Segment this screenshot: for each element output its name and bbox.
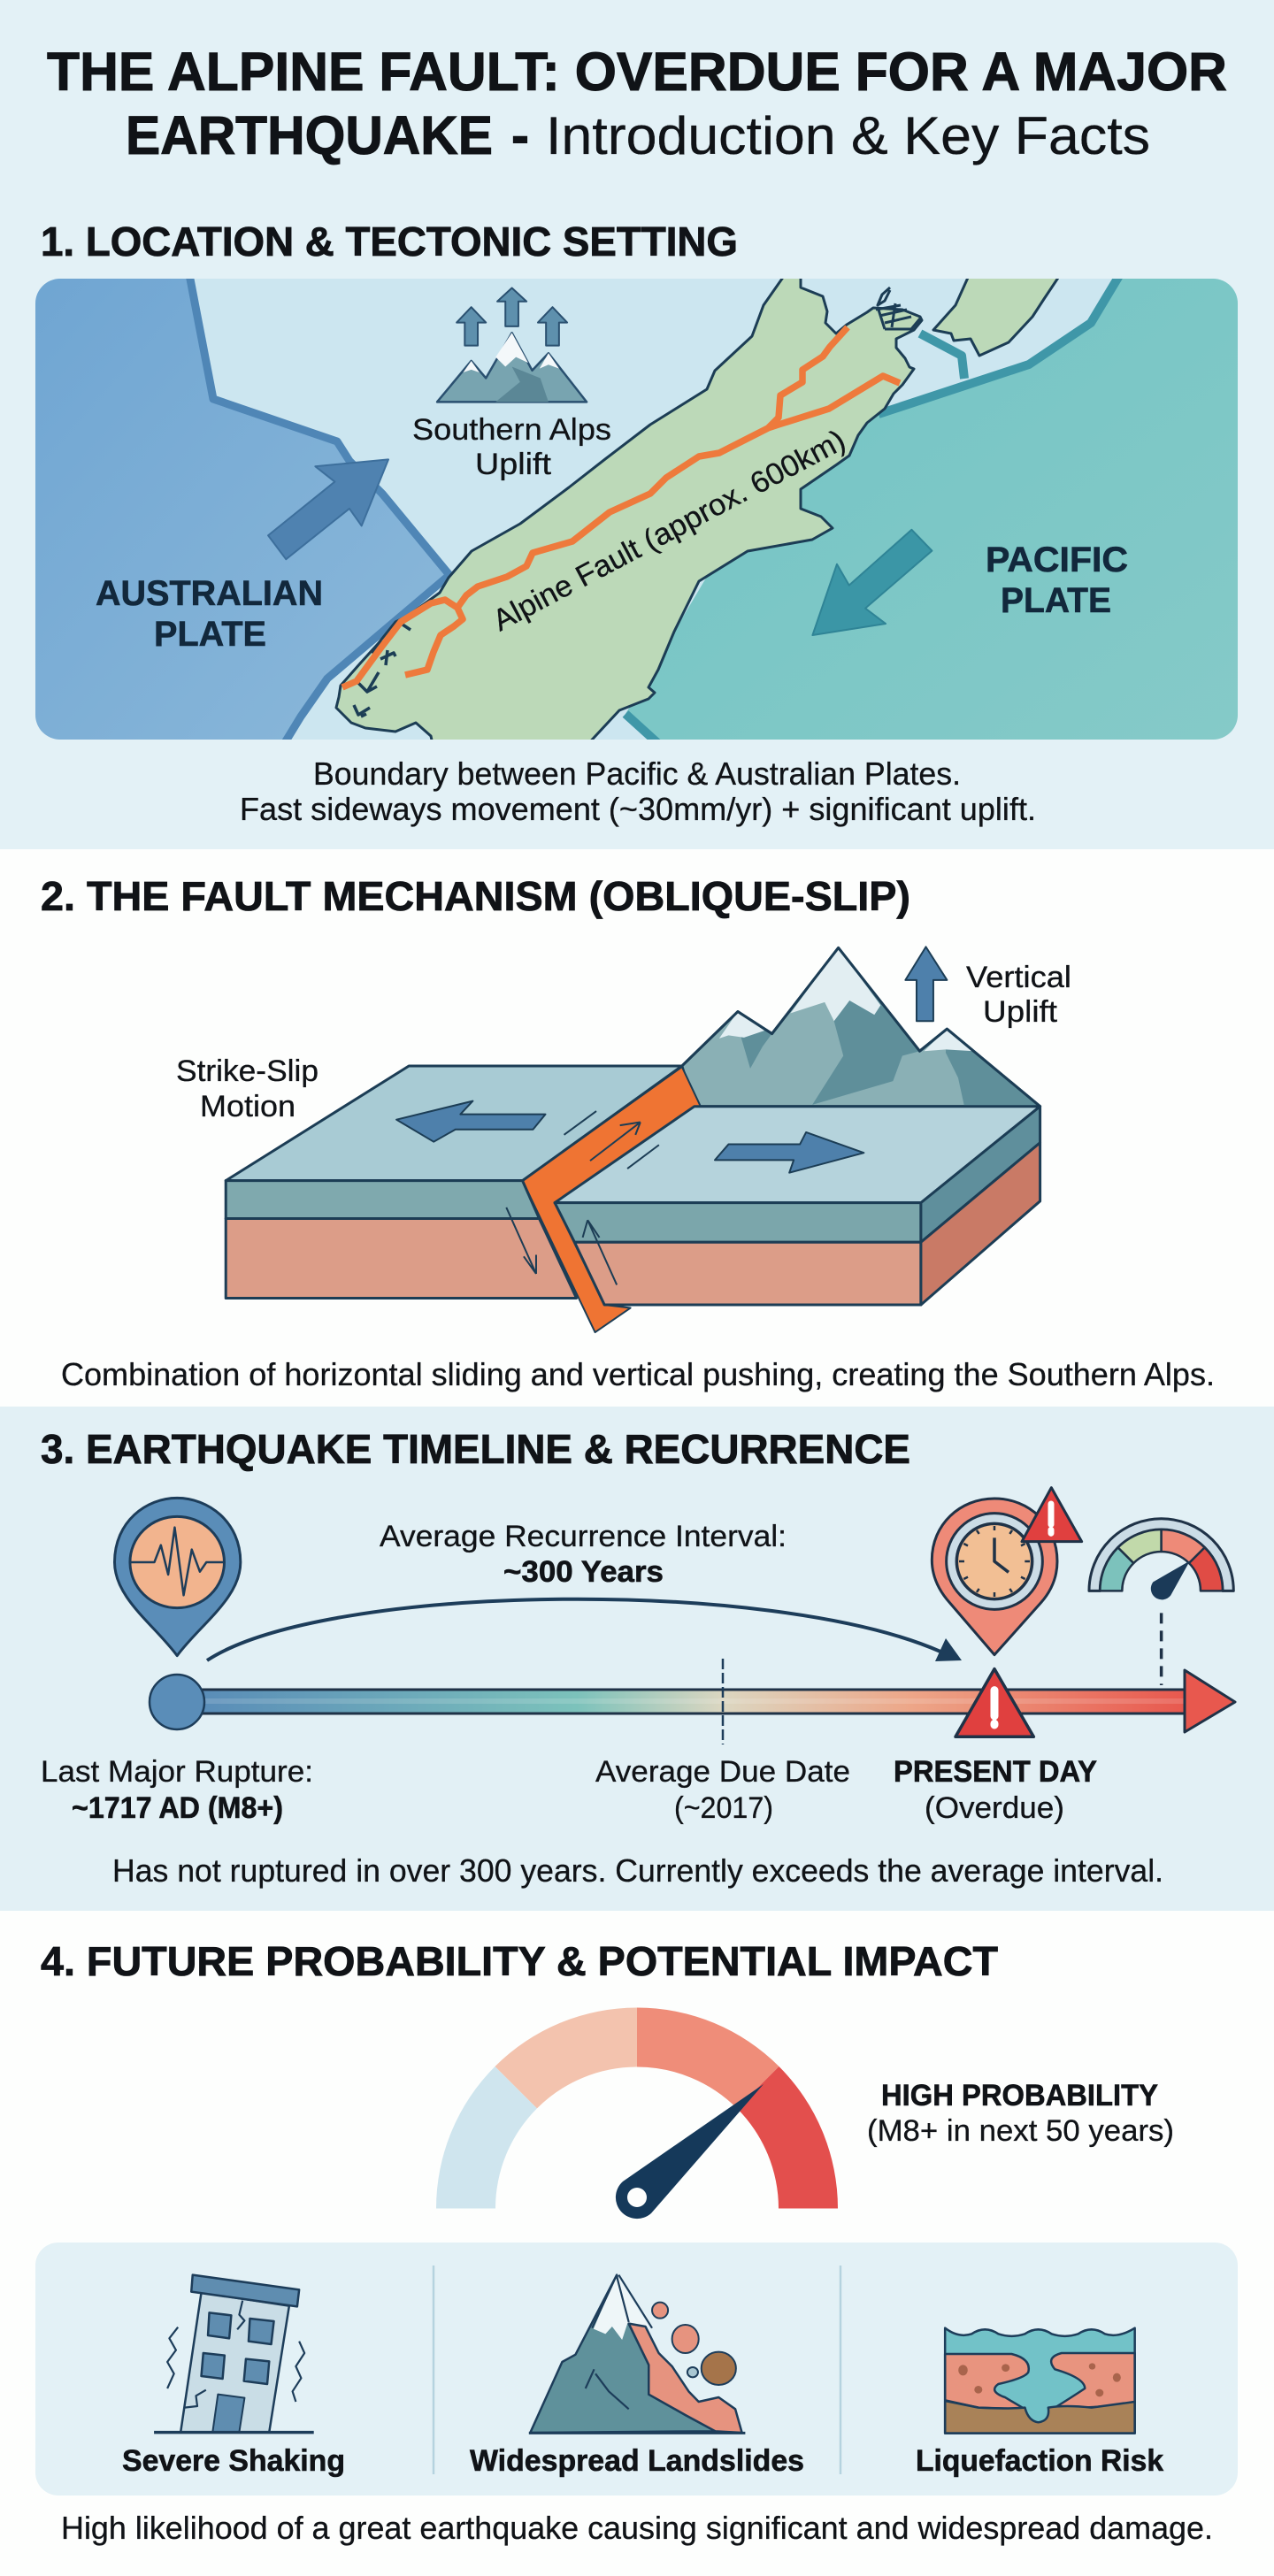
title: Introduction & Key Facts bbox=[546, 106, 1150, 165]
label: Southern Alps Uplift bbox=[412, 413, 611, 481]
fault block diagram bbox=[226, 947, 1040, 1332]
clock ring bbox=[947, 1514, 1042, 1609]
label: Southern Alps Uplift: Uplift bbox=[475, 448, 552, 481]
label: liquefaction risk: Liquefaction Risk bbox=[916, 2444, 1163, 2478]
pin: present day bbox=[932, 1499, 1057, 1655]
right block crust bbox=[555, 1203, 921, 1242]
warning mark: present day bbox=[990, 1690, 998, 1725]
caption: section 1 bbox=[240, 755, 1036, 827]
label: Southern Alps Uplift: Southern Alps bbox=[412, 413, 611, 447]
label: last rupture bbox=[41, 1755, 313, 1825]
title bbox=[47, 42, 1227, 165]
Australian plate arrow bbox=[268, 459, 388, 559]
heading: section 2: 2. THE FAULT MECHANISM (OBLIQUE-SLIP) bbox=[41, 873, 910, 919]
impact dividers bbox=[434, 2266, 840, 2474]
North Island bbox=[932, 279, 1060, 357]
label: Pacific Plate: PACIFIC bbox=[986, 540, 1128, 579]
bar edge lines bbox=[199, 1690, 1186, 1714]
label: present day bbox=[894, 1755, 1097, 1825]
title: EARTHQUAKE bbox=[126, 105, 493, 165]
panel: tectonic map bbox=[27, 270, 1274, 748]
timeline graphic bbox=[114, 1488, 1235, 1744]
mountains bbox=[682, 947, 1040, 1107]
clock hands bbox=[994, 1537, 1009, 1572]
caption: section 3: Has not ruptured in over 300 years. Currently exceeds the average interval. bbox=[112, 1852, 1163, 1889]
label: Australian Plate: PLATE bbox=[154, 615, 266, 654]
label: high probability: HIGH PROBABILITY bbox=[881, 2079, 1158, 2112]
needle hub bbox=[627, 2188, 647, 2207]
title: - bbox=[511, 105, 529, 165]
clock face bbox=[956, 1523, 1032, 1599]
Marlborough Sounds bbox=[876, 288, 920, 329]
caption: section 1: Fast sideways movement (~30mm/yr) + significant uplift. bbox=[240, 791, 1036, 827]
warning triangle: clock bbox=[1022, 1488, 1082, 1542]
timeline arrowhead bbox=[1185, 1670, 1235, 1732]
label: due date: (~2017) bbox=[674, 1791, 773, 1825]
label: Australian Plate bbox=[96, 574, 323, 654]
South Island bbox=[336, 270, 922, 748]
label: Strike-Slip Motion: Strike-Slip bbox=[176, 1054, 318, 1088]
label: present day: PRESENT DAY bbox=[894, 1755, 1097, 1789]
Pacific plate arrow bbox=[812, 530, 932, 635]
left block top bbox=[226, 1066, 682, 1181]
gauge high band bbox=[737, 2066, 838, 2208]
Pacific plate bbox=[625, 270, 1274, 748]
small gauge outer bbox=[1089, 1519, 1233, 1591]
section background: timeline bbox=[0, 1407, 1274, 1911]
label: recurrence interval bbox=[380, 1520, 787, 1589]
caption: section 1: Boundary between Pacific & Australian Plates. bbox=[313, 755, 961, 792]
mountain icon bbox=[437, 333, 587, 402]
small gauge green bbox=[1118, 1530, 1162, 1563]
left motion arrow bbox=[396, 1101, 545, 1142]
panel: impacts bbox=[35, 2242, 1238, 2496]
label: recurrence interval: ~300 Years bbox=[503, 1555, 664, 1589]
mountain shade bbox=[495, 366, 549, 402]
section background: probability bbox=[0, 1911, 1274, 2576]
title: THE ALPINE FAULT: OVERDUE FOR A MAJOR bbox=[47, 42, 1227, 102]
Alpine Fault line bbox=[342, 327, 900, 687]
label: widespread landslides: Widespread Landslides bbox=[470, 2444, 804, 2478]
warning triangle: present day bbox=[956, 1669, 1033, 1736]
label: Australian Plate: AUSTRALIAN bbox=[96, 574, 323, 613]
right side crust bbox=[921, 1107, 1040, 1242]
timeline bar bbox=[199, 1690, 1186, 1714]
probability gauge bbox=[436, 2008, 838, 2219]
small gauge orange bbox=[1162, 1530, 1205, 1563]
label: severe shaking: Severe Shaking bbox=[122, 2444, 345, 2478]
redraw mountain outline bbox=[682, 947, 1040, 1107]
icon: shaking building bbox=[154, 2275, 314, 2433]
clock pin, warning and small gauge bbox=[932, 1488, 1233, 1736]
label: present day: (Overdue) bbox=[925, 1791, 1064, 1825]
label: due date bbox=[595, 1755, 850, 1825]
due date marker bbox=[722, 1659, 724, 1744]
vertical uplift arrow bbox=[905, 947, 947, 1021]
label: Pacific Plate: PLATE bbox=[1001, 581, 1111, 620]
label: last rupture: Last Major Rupture: bbox=[41, 1755, 313, 1789]
bar highlight bbox=[199, 1698, 1186, 1704]
heading: section 1: 1. LOCATION & TECTONIC SETTING bbox=[41, 218, 738, 264]
fault plane bbox=[523, 1067, 701, 1332]
icon: landslide mountain bbox=[529, 2275, 745, 2433]
right block mantle bbox=[574, 1242, 921, 1305]
label: recurrence interval: Average Recurrence Interval: bbox=[380, 1520, 787, 1553]
right motion arrow bbox=[715, 1132, 863, 1173]
label: Pacific Plate bbox=[986, 540, 1128, 620]
section background: location bbox=[0, 0, 1274, 849]
caption: section 2: Combination of horizontal sliding and vertical pushing, creating the Southern Alps. bbox=[61, 1356, 1215, 1392]
gauge moderate band bbox=[495, 2008, 637, 2108]
clock ticks bbox=[959, 1526, 1030, 1597]
recurrence arrowhead bbox=[935, 1638, 962, 1661]
gauge needle bbox=[616, 2084, 764, 2219]
icon: liquefaction soil bbox=[945, 2328, 1135, 2434]
heading: section 4: 4. FUTURE PROBABILITY & POTENTIAL IMPACT bbox=[41, 1938, 998, 1984]
gauge drop line bbox=[1160, 1613, 1163, 1685]
gauge elevated band bbox=[637, 2008, 779, 2108]
label: high probability: (M8+ in next 50 years) bbox=[867, 2114, 1174, 2148]
small gauge needle bbox=[1151, 1560, 1190, 1599]
Pacific plate boundaries bbox=[625, 270, 1123, 748]
label: Strike-Slip Motion: Motion bbox=[200, 1090, 295, 1123]
left block mantle bbox=[226, 1218, 577, 1298]
gauge low band bbox=[436, 2066, 537, 2208]
right side mantle bbox=[921, 1143, 1040, 1305]
small gauge teal bbox=[1100, 1547, 1133, 1591]
uplift arrows bbox=[457, 288, 567, 346]
mountain snow bbox=[463, 333, 559, 372]
label: Alpine Fault: Alpine Fault (approx. 600km) bbox=[487, 424, 851, 638]
label: Vertical Uplift: Uplift bbox=[983, 995, 1058, 1029]
recurrence curve bbox=[207, 1599, 940, 1660]
sea bbox=[195, 279, 1112, 740]
timeline start bbox=[150, 1675, 204, 1729]
caption: section 4: High likelihood of a great earthquake causing significant and widespread damage. bbox=[61, 2510, 1213, 2546]
label: Strike-Slip Motion bbox=[176, 1054, 318, 1123]
plate arrows and uplift icon bbox=[268, 288, 932, 635]
heading: section 3: 3. EARTHQUAKE TIMELINE & RECURRENCE bbox=[41, 1426, 910, 1472]
mountain snow bbox=[719, 947, 974, 1051]
small motion marks bbox=[506, 1111, 659, 1284]
mountain shading bbox=[738, 947, 1040, 1107]
panel background bbox=[35, 2242, 1238, 2496]
warning mark: clock bbox=[1048, 1504, 1054, 1533]
left block crust bbox=[226, 1181, 539, 1218]
label: Vertical Uplift bbox=[966, 961, 1071, 1029]
pin: last rupture bbox=[114, 1498, 241, 1656]
Australian plate bbox=[27, 270, 449, 748]
label: Vertical Uplift: Vertical bbox=[966, 961, 1071, 994]
section background: mechanism bbox=[0, 849, 1274, 1407]
label: high probability bbox=[867, 2079, 1174, 2148]
right block top bbox=[555, 1107, 1040, 1203]
Fiordland detail bbox=[354, 625, 411, 717]
label: last rupture: ~1717 AD (M8+) bbox=[72, 1791, 283, 1825]
small gauge red bbox=[1189, 1547, 1223, 1591]
label: due date: Average Due Date bbox=[595, 1755, 850, 1789]
